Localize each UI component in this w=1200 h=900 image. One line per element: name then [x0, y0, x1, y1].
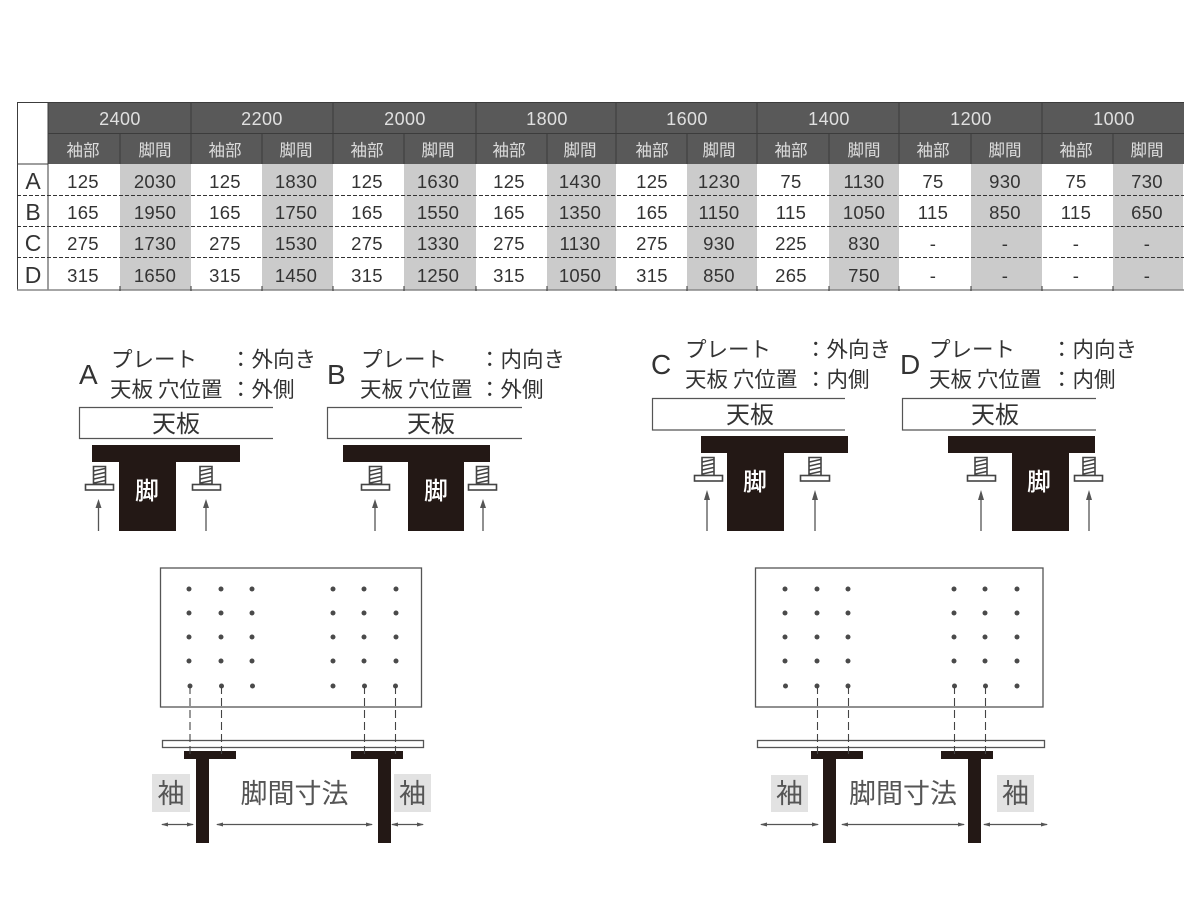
tabletop B	[328, 404, 522, 439]
row D: 315	[67, 265, 99, 286]
tabletop bar right	[758, 740, 1044, 748]
section diagram B	[327, 343, 565, 531]
leg C: 脚	[743, 462, 767, 497]
spec text A: ：外向き	[230, 343, 316, 374]
row B: 1150	[699, 202, 739, 223]
row C: C	[25, 230, 41, 256]
row A: 125	[493, 171, 525, 192]
row A	[25, 168, 1163, 194]
bolts and arrows D	[968, 458, 1102, 531]
dashed guides right	[818, 686, 986, 755]
row B: 1350	[559, 202, 601, 223]
row B: 115	[776, 202, 806, 223]
spec text C: プレート	[685, 333, 771, 364]
table header band: 2200	[241, 109, 283, 129]
row C: 1530	[275, 233, 317, 254]
row C: 275	[67, 233, 99, 254]
spec text B: ：内向き	[479, 343, 565, 374]
table header band: 2400	[99, 109, 141, 129]
row A: 930	[989, 171, 1021, 192]
row C: 275	[493, 233, 525, 254]
table header band: 袖部	[1060, 137, 1092, 161]
table header band: 袖部	[66, 137, 100, 161]
legs right	[811, 751, 993, 843]
row B: B	[25, 199, 41, 225]
legs left	[184, 751, 403, 843]
table header band: 袖部	[774, 137, 808, 161]
row A: 1630	[417, 171, 459, 192]
row D: 315	[493, 265, 525, 286]
table header band: 2000	[384, 109, 426, 129]
row B: 1950	[134, 202, 176, 223]
row C: -	[1002, 233, 1008, 254]
row B: 165	[351, 202, 383, 223]
row A: A	[25, 168, 41, 194]
table header band: 脚間	[564, 137, 596, 161]
table header band: 1000	[1093, 109, 1135, 129]
row A: 1430	[559, 171, 601, 192]
row B: 165	[209, 202, 241, 223]
row A: 75	[922, 171, 944, 192]
row C	[25, 230, 1150, 256]
tabletop A	[80, 404, 273, 439]
leg D	[948, 436, 1095, 531]
row C: -	[1073, 233, 1079, 254]
leg A: 脚	[135, 471, 159, 506]
spec text A	[110, 343, 316, 404]
row A: 125	[209, 171, 241, 192]
table header band	[17, 102, 1184, 290]
row D: 1650	[134, 265, 176, 286]
row A: 125	[67, 171, 99, 192]
label B: B	[327, 359, 346, 390]
label D: D	[900, 349, 920, 380]
row B: 115	[1061, 202, 1091, 223]
row B: 1550	[417, 202, 459, 223]
row C: 930	[703, 233, 735, 254]
table header band: 1200	[950, 109, 992, 129]
bolts and arrows B	[362, 466, 496, 531]
spec text B: プレート	[361, 343, 447, 374]
leg A	[92, 445, 240, 531]
size table	[17, 102, 1184, 291]
row D: 1450	[275, 265, 317, 286]
spec text A: 天板 穴位置	[110, 373, 222, 404]
leg span label right: 脚間寸法	[849, 772, 957, 811]
row B: 1050	[843, 202, 885, 223]
row C: 225	[775, 233, 807, 254]
row C: 830	[848, 233, 880, 254]
table header band: 脚間	[988, 137, 1022, 161]
tabletop C: 天板	[726, 395, 774, 430]
table header band: 脚間	[138, 137, 172, 161]
table header band: 脚間	[280, 137, 312, 161]
dimension arrows right	[760, 822, 1048, 826]
tabletop B: 天板	[407, 404, 455, 439]
row A: 1230	[698, 171, 740, 192]
table header band: 脚間	[702, 137, 736, 161]
table header band: 1400	[808, 109, 850, 129]
row C: 1730	[134, 233, 176, 254]
row B	[25, 199, 1163, 225]
table header band: 袖部	[350, 137, 384, 161]
row D: -	[1144, 265, 1150, 286]
bolts and arrows A	[86, 466, 220, 531]
leg D: 脚	[1027, 462, 1051, 497]
bolts and arrows C	[694, 458, 830, 531]
row D: 315	[636, 265, 668, 286]
sleeve label right inner: 袖	[1002, 772, 1029, 811]
section diagram C	[651, 333, 891, 531]
table header band: 1600	[666, 109, 708, 129]
table header band: 袖部	[492, 137, 526, 161]
dimension arrows left	[161, 822, 424, 826]
spec text A: プレート	[111, 343, 197, 374]
sleeve label left inner: 袖	[399, 772, 426, 811]
leg B	[343, 445, 490, 531]
row D: 315	[351, 265, 383, 286]
spec text C: ：外向き	[805, 333, 891, 364]
row A: 75	[1065, 171, 1087, 192]
label A: A	[79, 359, 98, 390]
row D: -	[930, 265, 936, 286]
tabletop D: 天板	[971, 395, 1019, 430]
row D: 315	[209, 265, 241, 286]
tabletop D	[902, 395, 1096, 430]
dashed guides left	[190, 686, 396, 755]
table header band: 脚間	[1130, 137, 1164, 161]
spec text D: プレート	[929, 333, 1015, 364]
table header band: 袖部	[916, 137, 950, 161]
tabletop hole plan right	[756, 568, 1043, 707]
row B: 165	[67, 202, 99, 223]
row D: 750	[848, 265, 880, 286]
row B: 115	[918, 202, 948, 223]
leg B: 脚	[424, 471, 448, 506]
row B: 650	[1131, 202, 1163, 223]
sleeve label right outer: 袖	[776, 772, 803, 811]
spec text C	[685, 333, 891, 394]
spec text B	[360, 343, 565, 404]
row D: 1250	[417, 265, 459, 286]
shaded leg-span columns	[120, 164, 1183, 290]
row D: 265	[775, 265, 807, 286]
table rules	[17, 196, 1184, 291]
row D: 1050	[559, 265, 601, 286]
row C: 275	[351, 233, 383, 254]
row B: 1750	[275, 202, 317, 223]
spec text C: 天板 穴位置	[685, 363, 797, 394]
row C: -	[930, 233, 936, 254]
spec text D: ：内向き	[1051, 333, 1137, 364]
table header band: 1800	[526, 109, 568, 129]
row C: -	[1144, 233, 1150, 254]
row C: 275	[209, 233, 241, 254]
tabletop A: 天板	[152, 404, 200, 439]
tabletop hole plan left	[160, 568, 422, 707]
row D	[25, 262, 1150, 288]
row A: 2030	[134, 171, 176, 192]
row D: 850	[703, 265, 735, 286]
front elevation left	[152, 686, 431, 843]
row A: 125	[636, 171, 668, 192]
label C: C	[651, 349, 671, 380]
tabletop C	[652, 395, 845, 430]
tabletop bar left	[162, 740, 424, 748]
spec text A: ：外側	[230, 373, 295, 404]
row C: 1130	[560, 233, 600, 254]
spec text C: ：内側	[805, 363, 870, 394]
spec text D	[929, 333, 1137, 394]
front elevation right	[758, 686, 1048, 843]
leg C	[701, 436, 848, 531]
row A: 75	[780, 171, 802, 192]
row B: 850	[989, 202, 1021, 223]
row C: 1330	[417, 233, 459, 254]
sleeve label left outer: 袖	[158, 772, 184, 811]
spec text D: ：内側	[1051, 363, 1116, 394]
table header band: 袖部	[636, 137, 668, 161]
section diagram A	[79, 343, 316, 531]
leg span label left: 脚間寸法	[240, 772, 348, 811]
sleeve label left outer	[152, 772, 190, 812]
row A: 1830	[275, 171, 317, 192]
spec text B: ：外側	[479, 373, 544, 404]
table header band: 脚間	[422, 137, 454, 161]
section diagram D	[900, 333, 1137, 531]
row A: 1130	[844, 171, 884, 192]
row D: D	[25, 262, 41, 288]
row C: 275	[636, 233, 668, 254]
row A: 125	[351, 171, 383, 192]
spec text D: 天板 穴位置	[929, 363, 1041, 394]
row D: -	[1002, 265, 1008, 286]
row B: 165	[493, 202, 525, 223]
spec text B: 天板 穴位置	[360, 373, 472, 404]
row D: -	[1073, 265, 1079, 286]
table header band: 袖部	[208, 137, 242, 161]
table header band: 脚間	[848, 137, 880, 161]
row A: 730	[1131, 171, 1163, 192]
row B: 165	[636, 202, 668, 223]
